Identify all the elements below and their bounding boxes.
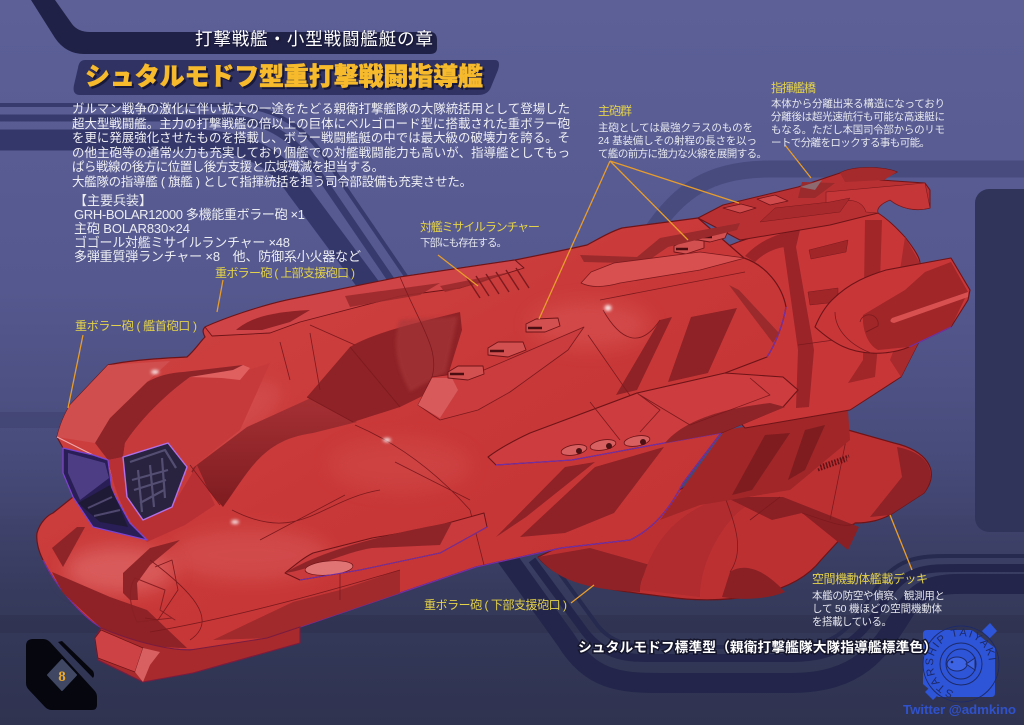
missile launcher ribs <box>467 268 529 298</box>
intro text block: 超大型戦闘艦。主力の打撃戦艦の倍以上の巨体にベルゴロード型に搭載された重ボラー砲 <box>72 116 570 131</box>
specular highlights <box>151 305 612 524</box>
callout: command bridge: 指揮艦橋 <box>771 80 816 95</box>
callout: main battery: て艦の前方に強力な火線を展開する。 <box>598 147 767 160</box>
callout: command bridge: もなる。ただし本国司令部からのリモ <box>771 123 945 136</box>
right bow aperture <box>123 443 187 520</box>
lower hangar pod <box>538 430 931 600</box>
intro text block: の他主砲等の通常火力も充実しており個艦での対艦戦闘能力も高いが、指導艦としてもっ <box>72 145 570 160</box>
panel lines <box>150 272 745 640</box>
callout: spacecraft deck: して 50 機ほどの空間機動体 <box>812 602 942 615</box>
callout: anti-ship missile launcher: 対艦ミサイルランチャー <box>420 220 540 234</box>
neck dark panels <box>190 397 357 507</box>
caption: standard colour: シュタルモドフ標準型（親衛打撃艦隊大隊指導艦標準色） <box>578 639 937 655</box>
label: bow gun: 重ボラー砲 ( 艦首砲口 ) <box>75 319 197 333</box>
upper support gun housing <box>205 260 524 336</box>
intro text block: ぱら戦線の後方に位置し後方支援と広域殲滅を担当する。 <box>72 159 384 174</box>
left bow aperture <box>63 448 147 540</box>
background stripes <box>0 105 1024 683</box>
callout: anti-ship missile launcher <box>420 220 540 249</box>
main heading: シュタルモドフ型重打撃戦闘指導艦 <box>85 63 483 91</box>
callout: main battery <box>598 104 767 160</box>
under-stern section <box>660 410 850 520</box>
lower bow stripes and belly <box>52 527 85 567</box>
upper deck dark band <box>580 223 740 263</box>
turret ridge <box>418 327 584 420</box>
side wing sponson <box>488 373 798 465</box>
main armament list: 多弾重質弾ランチャー ×8 他、防御系小火器など <box>74 249 361 264</box>
callout: spacecraft deck: を搭載している。 <box>812 615 892 628</box>
page number badge <box>26 639 97 710</box>
callout: main battery: 主砲群 <box>598 104 632 118</box>
label: upper support gun: 重ボラー砲 ( 上部支援砲口 ) <box>215 266 355 280</box>
hull stripes upper <box>616 317 672 395</box>
heading band <box>74 60 499 95</box>
soft highlights <box>65 301 650 594</box>
page number badge: 8 <box>58 669 66 685</box>
callout: spacecraft deck <box>812 571 945 628</box>
turret muzzles <box>450 237 712 374</box>
callout: anti-ship missile launcher: 下部にも存在する。 <box>420 236 507 249</box>
leader lines <box>68 145 912 603</box>
intro text block: ガルマン戦争の激化に伴い拡大の一途をたどる親衛打撃艦隊の大隊統括用として登場した <box>72 101 570 116</box>
main armament list <box>74 193 361 264</box>
label: lower support gun: 重ボラー砲 ( 下部支援砲口 ) <box>424 598 567 612</box>
top-left band behind chapter title <box>31 0 437 54</box>
illustration: starship <box>37 168 970 682</box>
main armament list: 主砲 BOLAR830×24 <box>74 221 190 236</box>
logo: Starship Taiyaki: STARSHIP TAIYAKI <box>925 628 996 698</box>
callout: main battery: 主砲としては最強クラスのものを <box>598 121 753 134</box>
intro text block: を更に発展強化させたものを搭載し、ボラー戦闘艦艇の中では最大級の破壊力を誇る。そ <box>72 130 570 145</box>
chapter title: 打撃戦艦・小型戦闘艦艇の章 <box>195 29 433 49</box>
raised housing <box>581 252 745 286</box>
bow hood and horn <box>95 365 243 460</box>
callout: command bridge: ートで分離をロックする事も可能。 <box>771 136 930 149</box>
panel: right side dark tab <box>975 189 1024 532</box>
main armament list: GRH-BOLAR12000 多機能重ボラー砲 ×1 <box>74 207 305 222</box>
callout: command bridge: 本体から分離出来る構造になっており <box>771 97 945 110</box>
stern block <box>720 213 925 428</box>
callout: command bridge <box>771 80 945 149</box>
forward lower fin <box>285 513 487 580</box>
hull stripes lower <box>496 462 595 537</box>
callout: command bridge: 分離後は超光速航行も可能な高速艇に <box>771 110 945 123</box>
lower keel block <box>95 627 300 682</box>
twitter handle: Twitter @admkino <box>903 702 1016 717</box>
intro text block <box>72 101 570 189</box>
intro text block: 大艦隊の指導艦 ( 旗艦 ) として指揮統括を担う司令部設備も充実させた。 <box>72 174 472 189</box>
engine pod <box>815 258 970 353</box>
main armament list: ゴゴール対艦ミサイルランチャー ×48 <box>74 235 290 250</box>
command bridge <box>698 168 930 240</box>
main armament list: 【主要兵装】 <box>74 193 152 208</box>
callout: spacecraft deck: 空間機動体艦載デッキ <box>812 571 928 586</box>
callout: spacecraft deck: 本艦の防空や偵察、観測用と <box>812 589 945 602</box>
underside purple trim <box>43 307 786 650</box>
main hull <box>37 218 786 650</box>
callout: main battery: 24 基装備しその射程の長さを以っ <box>598 134 757 147</box>
main turrets <box>448 231 728 380</box>
